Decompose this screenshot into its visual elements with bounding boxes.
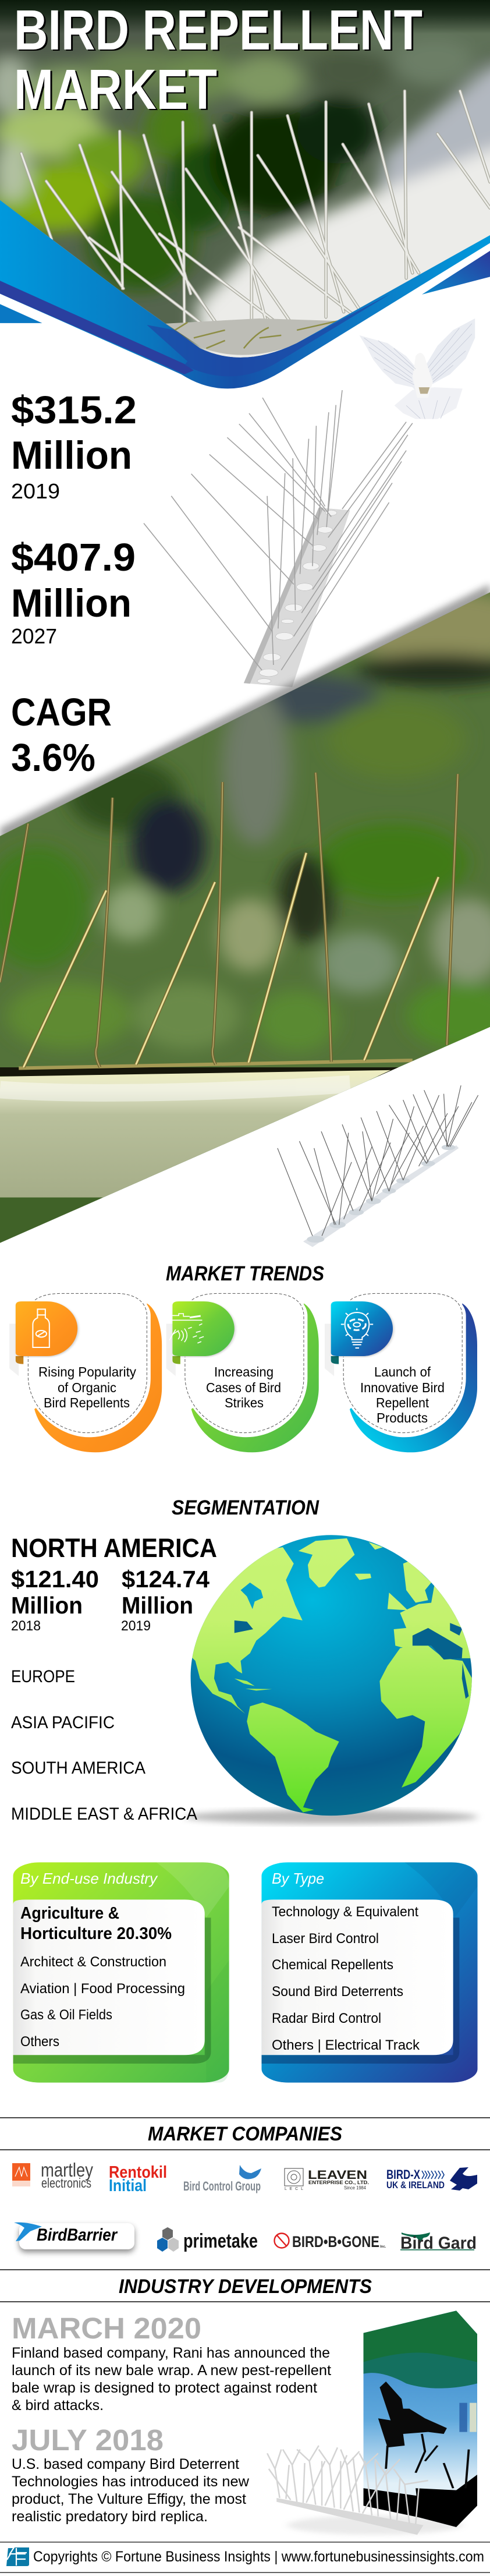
logo: bird barrier: BirdBarrier [37, 2225, 118, 2245]
development: march 2020: MARCH 2020 [12, 2312, 201, 2345]
land: caribbean [235, 1679, 272, 1690]
card: organic repellents: Bird Repellents [44, 1395, 130, 1410]
panel: trend cards [9, 1293, 477, 1452]
development: march 2020: & bird attacks. [12, 2397, 104, 2414]
regions list: SOUTH AMERICA [11, 1758, 145, 1778]
panel: by type: Technology & Equivalent [272, 1904, 418, 1920]
land: north america [187, 1547, 303, 1714]
card: bird strikes [166, 1293, 319, 1452]
stat: CAGR [11, 691, 112, 780]
stat: 2027 value: Million [11, 581, 132, 625]
stat: 2027 value [11, 536, 136, 648]
panel: by end-use industry: Agriculture & [20, 1904, 119, 1923]
land: iceland and svalbard [354, 1542, 383, 1580]
panel: by end-use industry: Architect & Construction [20, 1954, 166, 1970]
logo: martley electronics [12, 2159, 93, 2191]
logo: bird-x uk and ireland: BIRD-X [386, 2167, 420, 2182]
icon: light bulb with gear [341, 1308, 373, 1348]
development: march 2020 [12, 2312, 331, 2414]
development: march 2020: launch of its new bale wrap. A new pest-repellent [12, 2362, 331, 2379]
market value stats [11, 388, 137, 780]
land: british isles [388, 1593, 408, 1611]
stat: 2019 value [11, 388, 137, 503]
card: organic repellents: Rising Popularity [38, 1364, 136, 1379]
globe [184, 1535, 488, 1824]
logo: leaven enterprise: L E C L [285, 2187, 303, 2191]
logos: market companies [12, 2159, 477, 2253]
small bird spike strip [278, 1085, 478, 1247]
logo: primetake [157, 2227, 258, 2252]
panel: north america stats: NORTH AMERICA [11, 1533, 217, 1563]
icon: fortune business insights logo [6, 2547, 29, 2566]
second photo: brass spikes on rail [0, 584, 490, 1261]
title: MARKET [14, 58, 217, 121]
card: innovative products: Repellent [376, 1395, 429, 1410]
stat: 2018 [11, 1566, 99, 1634]
panel: by type [261, 1862, 478, 2083]
logo: leaven enterprise: ENTERPRISE CO., LTD. [308, 2180, 369, 2185]
logo: bird barrier [14, 2223, 134, 2249]
logo: bird-x uk and ireland: UK & IRELAND [386, 2179, 445, 2191]
panel: north america stats [11, 1533, 217, 1634]
panel: by end-use industry: By End-use Industry [20, 1870, 158, 1887]
card: innovative products: Products [377, 1410, 428, 1425]
stat: CAGR: 3.6% [11, 736, 95, 780]
regions list: EUROPE [11, 1667, 75, 1686]
logo: martley electronics: electronics [41, 2175, 91, 2191]
development: march 2020: bale wrap is designed to protect against rodent [12, 2380, 317, 2396]
stat: 2018: $121.40 [11, 1566, 99, 1593]
hero photo with bird spikes [0, 0, 490, 390]
development: july 2018 [12, 2423, 250, 2525]
panel: by type: By Type [272, 1870, 324, 1887]
logo: bird control group: Bird Control Group [183, 2179, 261, 2193]
logo: leaven enterprise: LEAVEN [308, 2168, 367, 2182]
heading: market companies: MARKET COMPANIES [148, 2123, 342, 2145]
card: innovative products: Innovative Bird [360, 1380, 445, 1395]
logo: leaven enterprise: Since 1984 [344, 2185, 367, 2191]
panel: by type: Radar Bird Control [272, 2011, 381, 2026]
logo: bird b gone: BIRD•B•GONE [292, 2233, 379, 2251]
development: july 2018: product, The Vulture Effigy, the most [12, 2491, 246, 2507]
card: innovative products: Launch of [374, 1364, 431, 1379]
panel: by end-use industry [13, 1862, 229, 2083]
land: eurasia [393, 1586, 470, 1659]
logo: rentokil initial: Initial [109, 2177, 147, 2195]
heading: segmentation: SEGMENTATION [172, 1496, 319, 1519]
stat: CAGR: CAGR [11, 691, 112, 734]
logo: primetake: primetake [183, 2230, 258, 2252]
stat: 2027 value: 2027 [11, 624, 57, 648]
logo: rentokil initial [109, 2163, 167, 2195]
development: july 2018: Technologies has introduced its new [12, 2474, 250, 2490]
heading: industry developments: INDUSTRY DEVELOPMENTS [119, 2276, 372, 2298]
stat: 2019 value: Million [11, 433, 132, 477]
logo: martley electronics: martley [41, 2159, 93, 2181]
stat: 2019 value: 2019 [11, 479, 60, 503]
regions list [11, 1667, 197, 1824]
development: july 2018: JULY 2018 [12, 2423, 164, 2457]
regions list: ASIA PACIFIC [11, 1713, 115, 1732]
card: bird strikes: Increasing [214, 1364, 274, 1379]
stat: 2018: Million [11, 1592, 83, 1619]
panel: by end-use industry: Horticulture 20.30% [20, 1924, 172, 1943]
logo: bird-x uk and ireland [386, 2167, 477, 2191]
bird spike product [144, 390, 413, 687]
stat: 2019: $124.74 [122, 1566, 210, 1593]
development: july 2018: realistic predatory bird replica. [12, 2508, 208, 2525]
card: innovative products [325, 1293, 477, 1452]
stat: 2019 [121, 1566, 210, 1634]
logo: bird b gone: Inc. [380, 2245, 386, 2249]
panel: by end-use industry: Gas & Oil Fields [20, 2007, 112, 2023]
icon: spray bottle [33, 1309, 49, 1347]
panel: by type: Chemical Repellents [272, 1957, 393, 1973]
development: july 2018: U.S. based company Bird Deterrent [12, 2456, 239, 2472]
box shadow [287, 2515, 463, 2535]
logo: rentokil initial: Rentokil [109, 2163, 167, 2182]
stat: 2019 value: $315.2 [11, 388, 137, 432]
card: organic repellents: of Organic [58, 1380, 116, 1395]
heading: market trends: MARKET TRENDS [166, 1262, 324, 1285]
development: march 2020: Finland based company, Rani has announced the [12, 2345, 330, 2361]
card: organic repellents [9, 1293, 162, 1452]
logo: bird gard: Bird Gard [400, 2234, 477, 2253]
icon: predatory bird silhouette [378, 2382, 447, 2447]
blue swoosh banner [0, 200, 490, 388]
card: bird strikes: Strikes [225, 1395, 264, 1410]
title [14, 0, 422, 121]
panel: by end-use industry: Aviation | Food Processing [20, 1981, 185, 1997]
panel: by end-use industry: Others [20, 2034, 59, 2050]
card: bird strikes: Cases of Bird [206, 1380, 281, 1395]
panel: by type: Others | Electrical Track [272, 2037, 420, 2053]
icon: plane and birds [166, 1314, 204, 1343]
stat: 2019: Million [122, 1592, 193, 1619]
stat: 2027 value: $407.9 [11, 536, 136, 579]
land: africa [379, 1643, 475, 1788]
panel: by type: Laser Bird Control [272, 1931, 379, 1947]
land: greenland [299, 1538, 354, 1587]
logo: bird control group [183, 2165, 261, 2193]
stat: 2018: 2018 [11, 1618, 41, 1634]
product box with spikes image [267, 2310, 477, 2535]
land: south america [247, 1703, 339, 1812]
icon: white dove [360, 319, 475, 419]
stat: 2019: 2019 [121, 1618, 151, 1634]
land: scandinavia [403, 1561, 431, 1603]
logo: leaven enterprise [285, 2168, 369, 2191]
regions list: MIDDLE EAST & AFRICA [11, 1804, 197, 1824]
panel: by type: Sound Bird Deterrents [272, 1984, 403, 2000]
